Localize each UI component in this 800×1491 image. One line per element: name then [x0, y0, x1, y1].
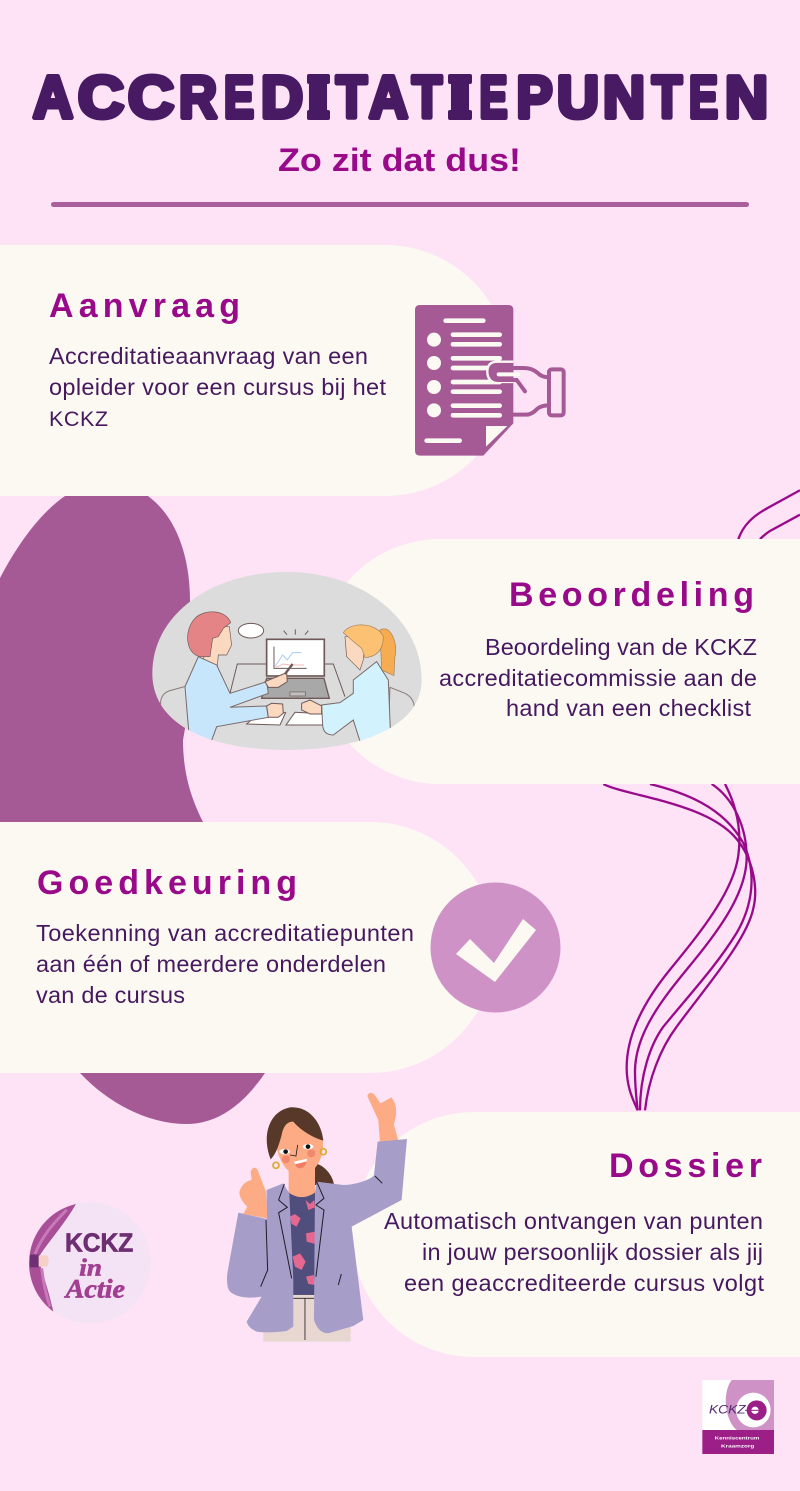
panel: Dossier	[352, 1112, 800, 1357]
heading: Goedkeuring: Goedkeuring	[37, 864, 297, 902]
laptop	[262, 678, 329, 698]
woman left	[185, 612, 293, 745]
text: Goedkeuring body: aan één of meerdere onderdelen	[36, 951, 386, 977]
title: T	[652, 64, 682, 130]
text: Beoordeling body: Beoordeling van de KCKZ	[485, 634, 757, 660]
text: Aanvraag body	[49, 343, 386, 431]
neck and head	[289, 1167, 315, 1197]
panel: Goedkeuring	[0, 822, 495, 1073]
text: Dossier body	[384, 1208, 764, 1296]
left hand	[239, 1168, 267, 1218]
decorative purple blob under panel 3	[80, 1073, 265, 1124]
heading: Beoordeling: Beoordeling	[509, 576, 754, 614]
badge: KCKZ in Actie: in	[79, 1254, 102, 1281]
illustration: two people reviewing a chart	[152, 572, 422, 750]
trousers	[263, 1294, 351, 1342]
papers	[247, 712, 327, 725]
badge: KCKZ in Actie: Actie	[63, 1274, 125, 1303]
text: Aanvraag body: Accreditatieaanvraag van een	[49, 343, 368, 369]
logo: Kenniscentrum Kraamzorg: Kenniscentrum	[715, 1436, 760, 1442]
icon: check mark in circle	[430, 882, 560, 1012]
logo: Kenniscentrum Kraamzorg: KCKZ	[709, 1402, 746, 1416]
speech bubble	[238, 623, 264, 638]
title: D	[261, 64, 303, 130]
title: R	[179, 64, 217, 130]
text: Aanvraag body: KCKZ	[49, 407, 108, 431]
decorative purple blob behind panel 2	[0, 496, 203, 822]
title	[33, 64, 768, 130]
top	[287, 1192, 317, 1295]
chairs	[161, 686, 189, 737]
title: E	[224, 64, 254, 130]
icon: document with hand	[415, 305, 564, 456]
text: Goedkeuring body: van de cursus	[36, 982, 185, 1008]
table	[210, 664, 362, 744]
title: T	[412, 64, 442, 130]
ponytail	[315, 1163, 334, 1185]
raised hand	[367, 1093, 398, 1143]
badge: KCKZ in Actie	[29, 1202, 151, 1323]
woman right	[302, 625, 396, 747]
title: U	[557, 64, 599, 130]
title: I	[307, 64, 329, 130]
logo: Kenniscentrum Kraamzorg: Kraamzorg	[721, 1443, 754, 1449]
title: E	[689, 64, 718, 130]
text: Goedkeuring body: Toekenning van accreditatiepunten	[36, 920, 414, 946]
title: A	[33, 64, 73, 130]
title: A	[369, 64, 408, 130]
text: Dossier body: Automatisch ontvangen van punten	[384, 1208, 763, 1234]
face	[273, 1144, 326, 1168]
title: P	[516, 64, 552, 130]
text: Beoordeling body: accreditatiecommissie aan de	[439, 665, 757, 691]
text: Dossier body: een geaccrediteerde cursus volgt	[404, 1270, 764, 1296]
title: C	[78, 64, 124, 130]
decorative curved lines	[603, 490, 800, 1110]
title: N	[725, 64, 768, 130]
title: N	[603, 64, 645, 130]
title: E	[480, 64, 508, 130]
heading: Aanvraag: Aanvraag	[49, 287, 240, 325]
title: T	[336, 64, 367, 130]
panel: Aanvraag	[0, 245, 564, 496]
title: I	[449, 64, 471, 130]
illustration: woman giving thumbs up	[227, 1093, 407, 1342]
text: Beoordeling body	[439, 634, 757, 721]
title: C	[128, 64, 174, 130]
badge: KCKZ in Actie: KCKZ	[65, 1227, 133, 1257]
text: Beoordeling body: hand van een checklist	[506, 695, 751, 721]
jacket	[314, 1139, 407, 1333]
logo: Kenniscentrum Kraamzorg	[702, 1380, 774, 1454]
text: Goedkeuring body	[36, 920, 414, 1008]
text: Aanvraag body: opleider voor een cursus bij het	[49, 374, 386, 400]
panel: Beoordeling	[318, 539, 800, 784]
text: Dossier body: in jouw persoonlijk dossier als jij	[422, 1239, 763, 1265]
subtitle: Zo zit dat dus!	[278, 142, 521, 178]
heading: Dossier: Dossier	[609, 1147, 762, 1185]
